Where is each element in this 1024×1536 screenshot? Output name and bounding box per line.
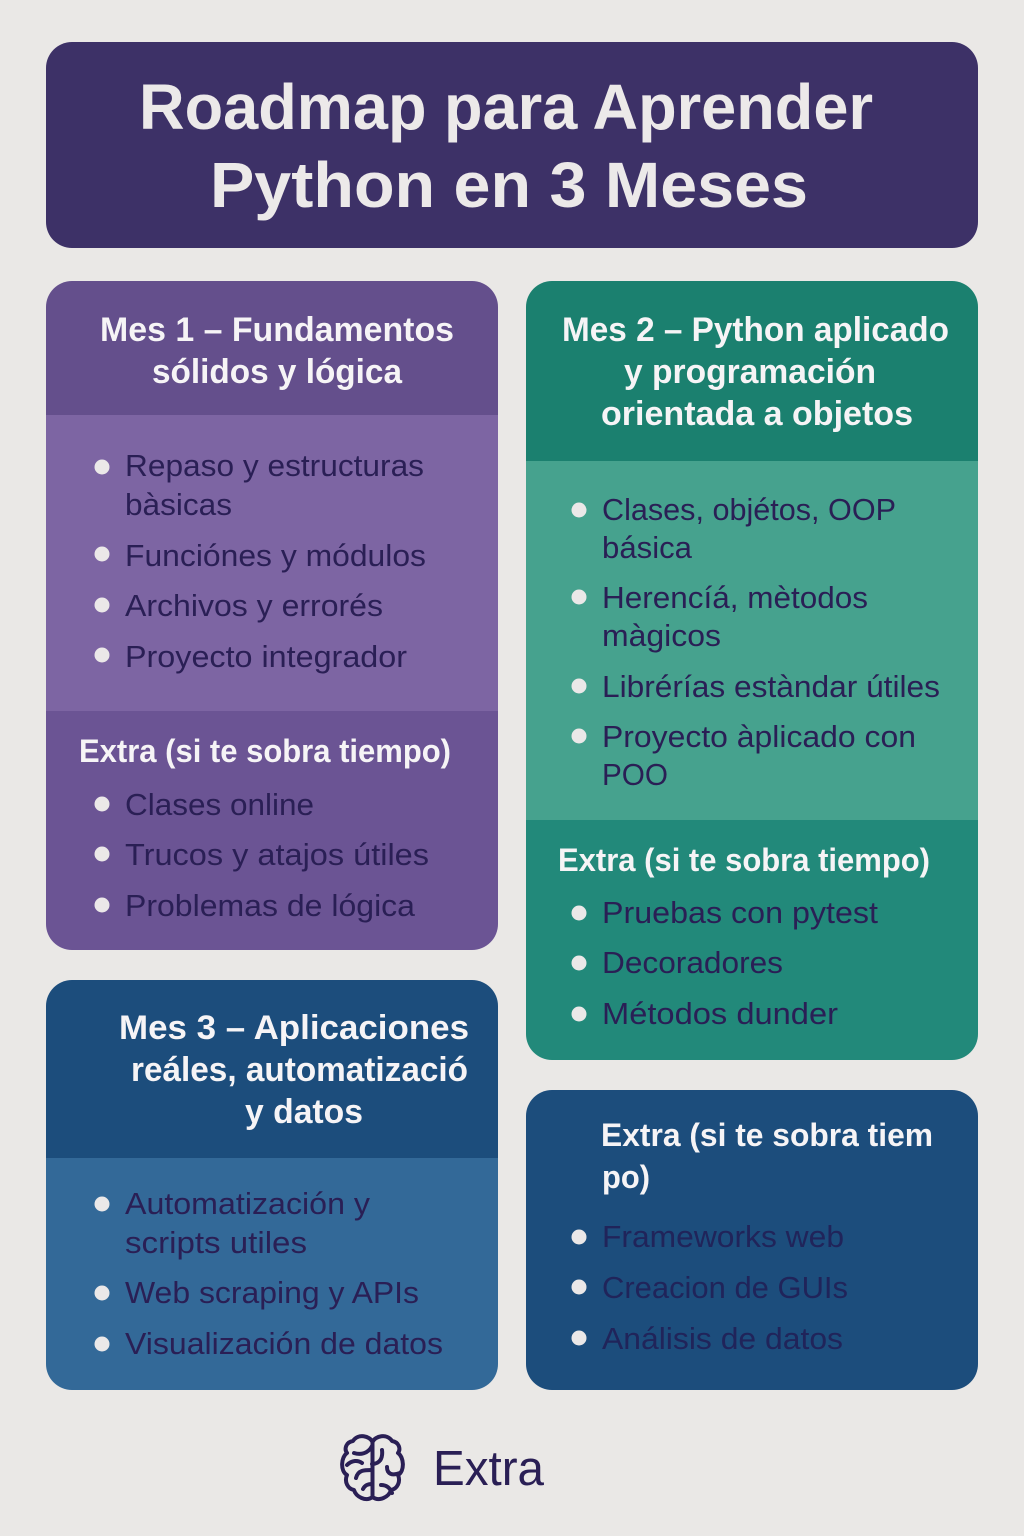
heading: Mes 1 extra: Extra (si te sobra tiempo): [79, 733, 451, 769]
list: Mes 1 topics: [94, 448, 426, 674]
list: Mes 2 topics: básica: [602, 530, 693, 565]
list: Mes 1 extras: Clases online: [125, 787, 314, 822]
list: Extra topics: [572, 1219, 848, 1356]
list: Mes 2 topics: Librérías estàndar útiles: [602, 669, 940, 704]
panel: Mes 3: [46, 980, 498, 1390]
list: Mes 1 extras: [94, 787, 429, 923]
label: Extra: Extra: [433, 1442, 545, 1496]
heading: Mes 2 extra: Extra (si te sobra tiempo): [558, 842, 930, 878]
heading: Extra: [601, 1117, 933, 1195]
title banner: [46, 42, 978, 248]
list: Mes 2 extras: Métodos dunder: [602, 996, 838, 1031]
list: Mes 3 topics: scripts utiles: [125, 1225, 307, 1260]
list: Mes 2 topics: Clases, objétos, OOP: [602, 492, 896, 527]
heading: Mes 3: reáles, automatizació: [131, 1051, 468, 1089]
panel: Mes 2: [526, 281, 978, 1060]
list: Mes 2 extras: [572, 895, 878, 1031]
list: Mes 2 topics: màgicos: [602, 618, 721, 653]
panel: Extra: [526, 1090, 978, 1390]
list: Mes 2 extras: Decoradores: [602, 945, 783, 980]
list: Mes 1 topics: Archivos y errorés: [125, 588, 383, 623]
list: Mes 1 topics: Repaso y estructuras: [125, 448, 424, 483]
heading: Mes 2: y programación: [624, 353, 876, 391]
list: Mes 1 topics: Proyecto integrador: [125, 639, 407, 674]
heading: Mes 2: Mes 2 – Python aplicado: [562, 311, 949, 349]
heading: Extra: po): [602, 1159, 650, 1195]
list: Mes 3 topics: Automatización y: [125, 1186, 371, 1221]
heading: Mes 1: sólidos y lógica: [152, 353, 403, 391]
list: Mes 2 topics: Herencíá, mètodos: [602, 580, 868, 615]
list: Mes 1 topics: Funciónes y módulos: [125, 538, 426, 573]
list: Mes 1 topics: bàsicas: [125, 487, 232, 522]
list: Mes 3 topics: [94, 1186, 443, 1361]
list: Mes 3 topics: Web scraping y APIs: [125, 1275, 419, 1310]
panel: Mes 1: [46, 281, 498, 950]
heading: Extra: Extra (si te sobra tiem: [601, 1117, 933, 1153]
list: Extra topics: Creacion de GUIs: [602, 1270, 848, 1305]
heading: Mes 1: [100, 311, 454, 391]
heading: Mes 1: Mes 1 – Fundamentos: [100, 311, 454, 349]
title line 2: Python en 3 Meses: [210, 149, 808, 221]
heading: Mes 3: Mes 3 – Aplicaciones: [119, 1009, 469, 1047]
icon: brain: [342, 1436, 403, 1499]
list: Mes 2 topics: Proyecto àplicado con: [602, 719, 916, 754]
list: Mes 2 topics: POO: [602, 757, 668, 792]
list: Mes 1 extras: Problemas de lógica: [125, 888, 416, 923]
list: Mes 2 topics: [572, 492, 940, 792]
list: Mes 1 extras: Trucos y atajos útiles: [125, 837, 429, 872]
heading: Mes 3: y datos: [245, 1093, 363, 1131]
list: Extra topics: Frameworks web: [602, 1219, 844, 1254]
footer: brain icon and label: [342, 1436, 545, 1499]
list: Extra topics: Análisis de datos: [602, 1321, 843, 1356]
heading: Mes 2: orientada a objetos: [601, 395, 913, 433]
heading: Mes 2: [562, 311, 949, 433]
list: Mes 2 extras: Pruebas con pytest: [602, 895, 878, 930]
list: Mes 3 topics: Visualización de datos: [125, 1326, 443, 1361]
title line 1: Roadmap para Aprender: [139, 71, 873, 143]
heading: Mes 3: [119, 1009, 469, 1131]
